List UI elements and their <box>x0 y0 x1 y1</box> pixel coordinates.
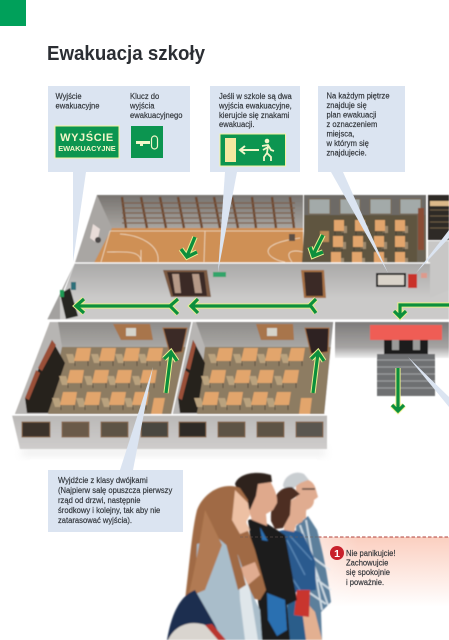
panel: evacuation plan <box>318 86 405 172</box>
title: Ewakuacja szkoły <box>47 42 206 65</box>
text: evacuation plan note: plan ewakuacji <box>326 110 377 120</box>
arrow: outside exit <box>392 368 404 411</box>
text: two exits note: ewakuacji. <box>219 120 255 129</box>
text: leaving classroom note: Wyjdźcie z klasy dwójkami <box>58 476 148 485</box>
student: man with cap and glasses <box>283 473 331 640</box>
text: exit key label: ewakuacyjnego <box>130 111 183 120</box>
upper classroom <box>302 195 426 267</box>
student: woman in denim jacket <box>271 487 322 640</box>
text: exit key label: Klucz do <box>130 92 159 101</box>
corridor edge highlight <box>46 263 449 320</box>
lower right classroom <box>172 322 334 414</box>
text: evacuation plan note: Na każdym piętrze <box>326 91 390 101</box>
text: two exits note: Jeśli w szkole są dwa <box>219 92 292 101</box>
text: stay calm: i poważnie. <box>346 578 384 587</box>
student: man in black jacket <box>235 473 297 640</box>
icon: emergency exit sign: WYJŚCIE <box>60 131 114 144</box>
icon: exit key sign <box>131 126 163 158</box>
text: evacuation plan note: znajduje się <box>326 101 367 110</box>
callout tail: entrance stairs <box>408 357 449 407</box>
icon: number 1: 1 <box>334 548 340 560</box>
text: stay calm: Zachowujcie <box>346 558 389 568</box>
text: stay calm: się spokojnie <box>346 568 391 577</box>
text: exit key label: wyjścia <box>129 101 155 111</box>
panel: step 1 <box>318 537 449 607</box>
arrow: corridor left <box>76 299 178 314</box>
text: emergency exit label: ewakuacyjne <box>56 101 100 111</box>
corridor <box>47 263 449 320</box>
text: leaving classroom note: rząd od drzwi, następnie <box>58 496 141 505</box>
text: leaving classroom note: środkowy i kolejny, tak aby nie <box>58 506 161 515</box>
text: evacuation plan note: z oznaczeniem <box>326 120 378 129</box>
arrow: classroom exit <box>310 235 323 256</box>
panel: exit signs <box>48 86 190 172</box>
building floor plan <box>12 195 449 456</box>
arrow: right classroom exit <box>311 352 324 393</box>
panel: two exits <box>210 86 300 172</box>
front wall with windows <box>12 415 327 449</box>
text: two exits note: kierujcie się znakami <box>219 111 289 120</box>
callout tail: classroom <box>120 367 153 470</box>
arrow: left classroom exit <box>164 352 177 393</box>
lower left classroom <box>15 322 192 414</box>
text: evacuation plan note: znajdujecie. <box>326 148 367 158</box>
school entrance <box>335 322 449 396</box>
arrow: corridor to exit <box>394 305 449 317</box>
arrow: gym exit <box>181 237 197 257</box>
text: evacuation plan note: w którym się <box>326 139 369 148</box>
text: emergency exit label: Wyjście <box>56 92 82 101</box>
icon: emergency exit sign: EWAKUACYJNE <box>58 144 116 153</box>
dashed line <box>318 536 449 538</box>
text: evacuation plan note: miejsca, <box>326 129 354 139</box>
classroom divider <box>172 322 334 414</box>
text: stay calm: Nie panikujcie! <box>346 549 396 558</box>
student: woman with long hair <box>167 486 266 640</box>
right side room <box>428 195 449 305</box>
text: leaving classroom note: zatarasować wyjścia). <box>58 516 132 525</box>
icon: running man exit sign <box>220 134 286 166</box>
panel: leaving classroom in pairs <box>48 470 183 532</box>
text: leaving classroom note: (Najpierw salę opuszcza pierwszy <box>58 486 172 495</box>
students group <box>167 473 331 640</box>
green corner square <box>0 0 26 26</box>
callout tail: emergency exit sign <box>218 172 237 272</box>
arrow: corridor middle <box>191 299 316 313</box>
callout tail: exit key <box>73 172 86 262</box>
icon: emergency exit sign <box>55 126 119 158</box>
callout tail: fire extinguisher <box>416 230 449 273</box>
building drop shadow <box>22 448 325 456</box>
text: two exits note: wyjścia ewakuacyjne, <box>218 101 292 110</box>
gymnasium <box>75 195 303 263</box>
callout tail: evacuation plan <box>331 172 388 273</box>
